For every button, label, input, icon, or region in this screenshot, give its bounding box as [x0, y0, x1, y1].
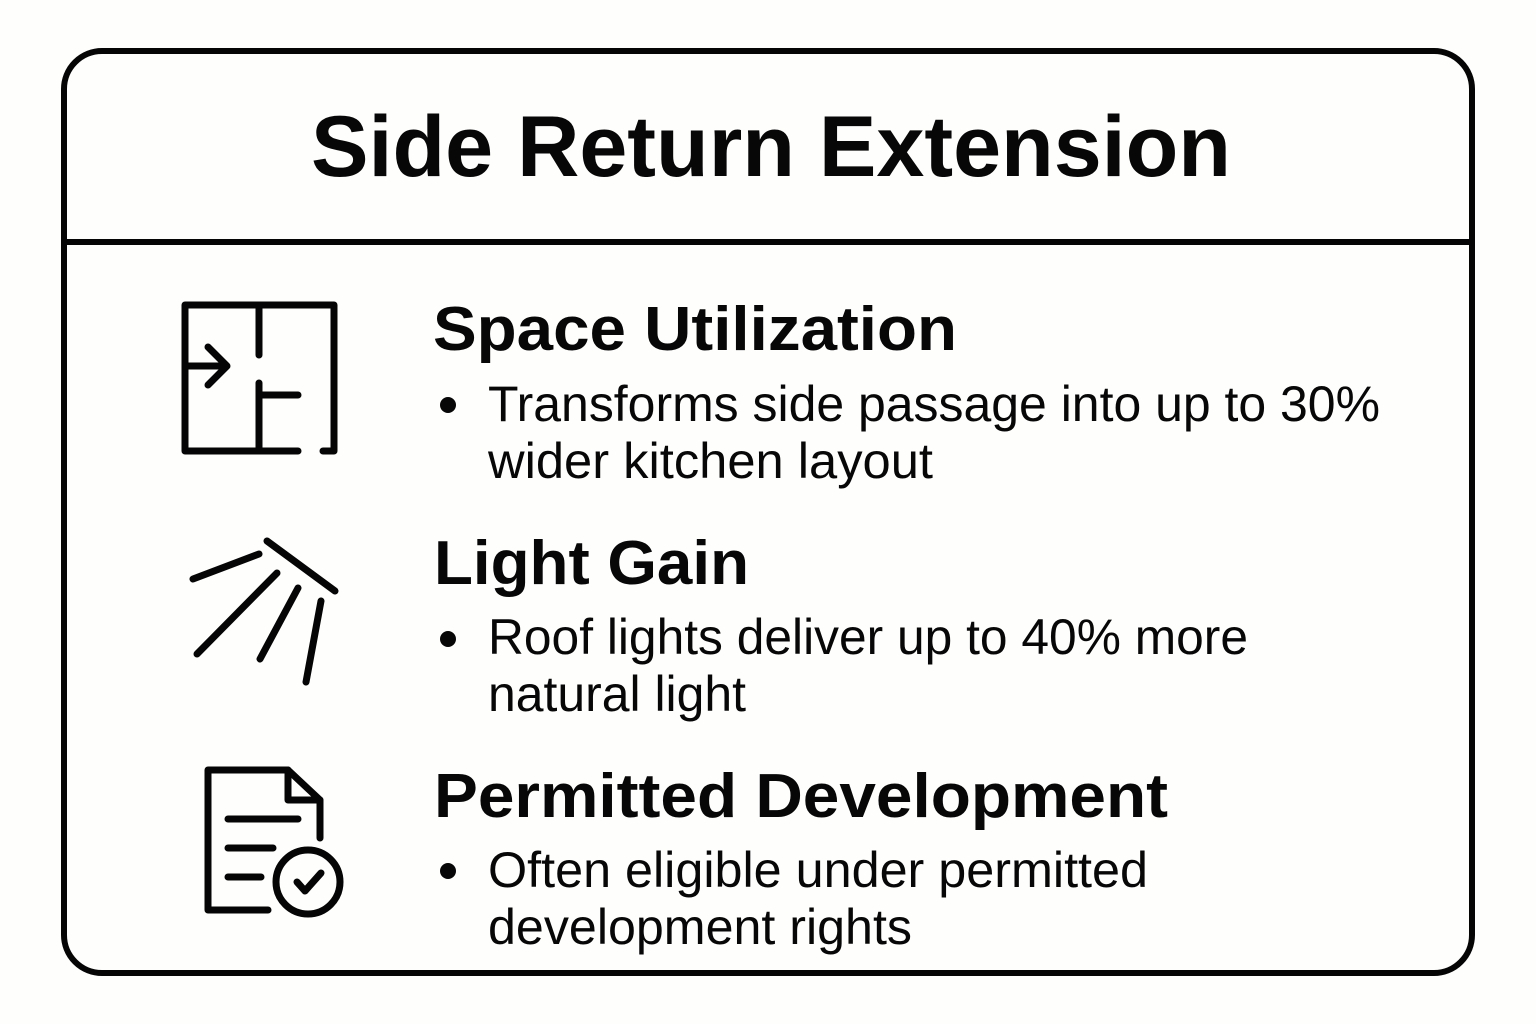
- section: space utilization: [433, 295, 1380, 489]
- section: light gain: [434, 529, 1248, 722]
- text: light gain detail: Roof lights deliver up to 40% more: [488, 609, 1248, 665]
- heading: light gain: Light Gain: [434, 529, 749, 598]
- text: light gain detail: natural light: [488, 666, 746, 722]
- bullet dot: [440, 631, 456, 647]
- text: permitted development detail: development rights: [488, 899, 912, 955]
- text: space utilization detail: wider kitchen layout: [487, 433, 933, 489]
- icon: light rays: [193, 541, 335, 682]
- icon: floor plan with arrow: [185, 305, 334, 451]
- text: space utilization detail: Transforms side passage into up to 30%: [488, 376, 1380, 432]
- heading: permitted development: Permitted Development: [434, 762, 1168, 831]
- heading: space utilization: Space Utilization: [433, 295, 957, 364]
- section: permitted development: [434, 762, 1168, 955]
- bullet dot: [440, 397, 456, 413]
- title: Side Return Extension: [311, 99, 1231, 195]
- icon: document with check mark: [208, 770, 340, 914]
- bullet dot: [440, 863, 456, 879]
- text: permitted development detail: Often eligible under permitted: [488, 842, 1148, 898]
